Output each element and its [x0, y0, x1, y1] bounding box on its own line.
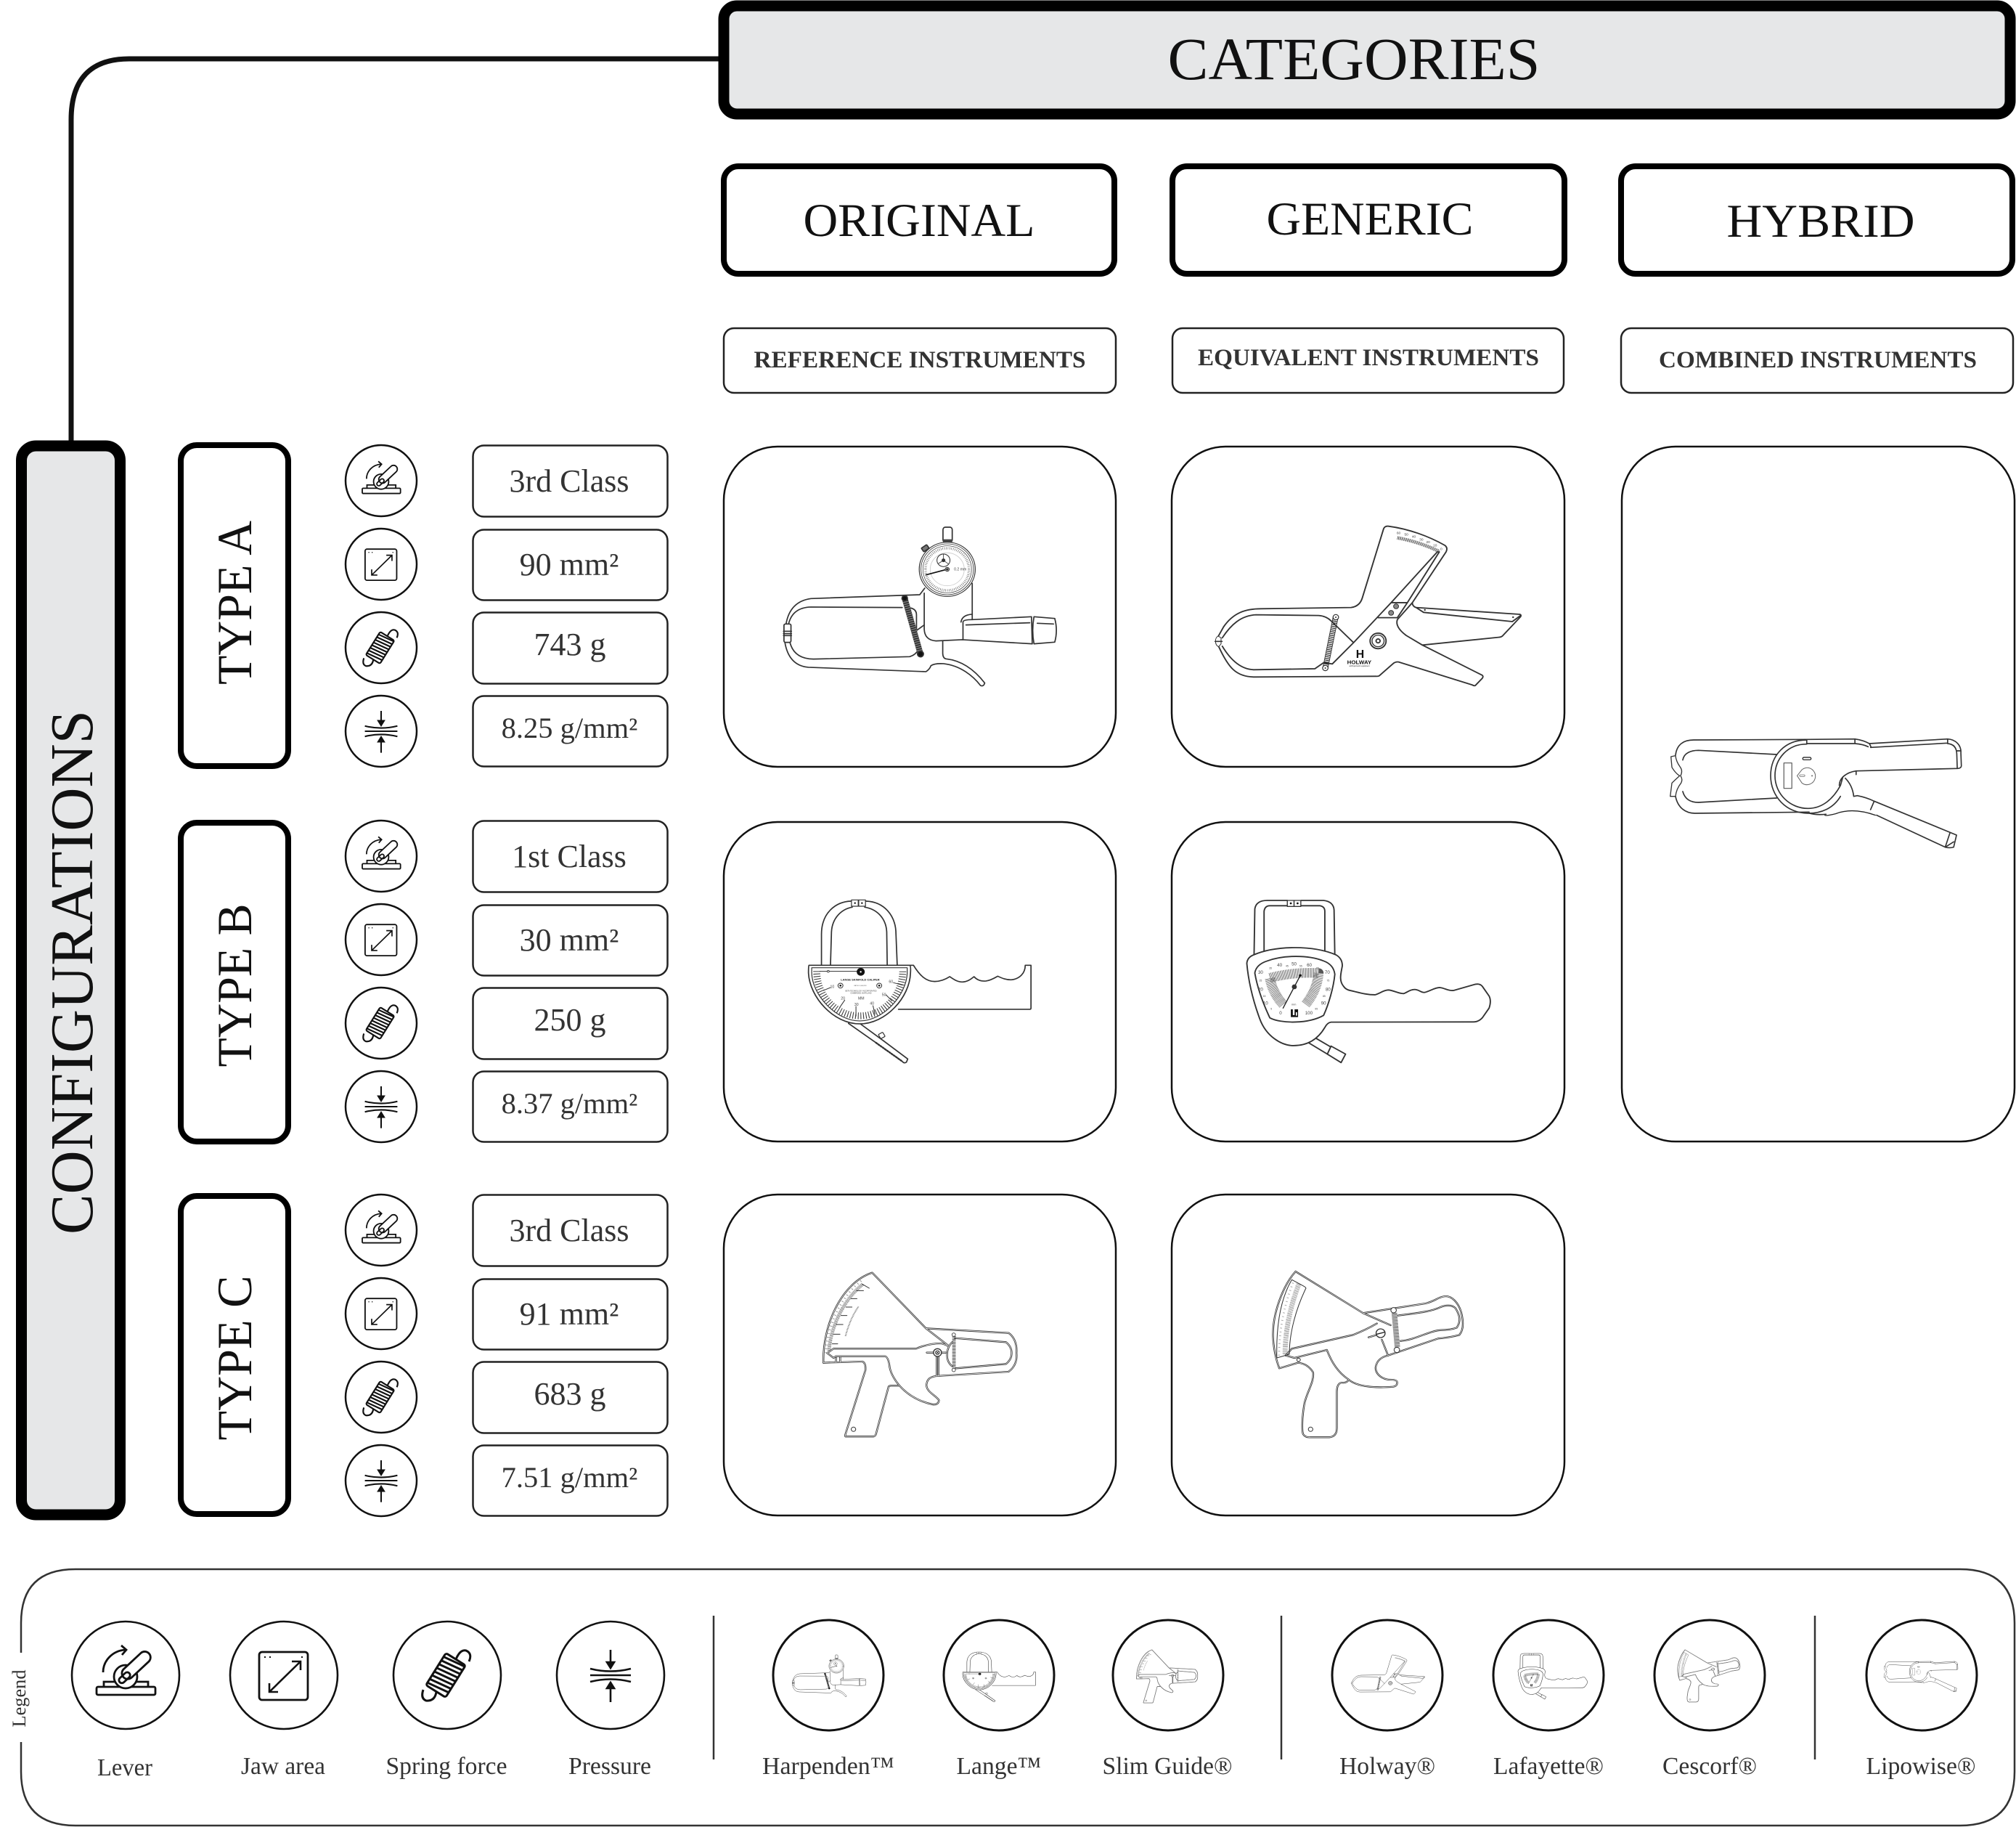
- illustration: Lafayette caliper: 35: [1269, 967, 1272, 969]
- spec: lever class: [346, 1195, 668, 1266]
- illustration: Cescorf caliper: [1273, 1271, 1463, 1437]
- illustration: Lafayette caliper: 25: [1259, 980, 1262, 982]
- illustration: Lafayette caliper: [1246, 900, 1490, 1062]
- connector: categories to configurations: [71, 59, 719, 442]
- spec: spring force: 250 g: [534, 1002, 605, 1038]
- legend item: Lipowise: Lipowise®: [1866, 1753, 1976, 1780]
- spec: pressure: [346, 1071, 668, 1142]
- illustration: Lafayette caliper: 100: [1305, 1011, 1313, 1016]
- illustration: Lafayette caliper: 15: [1263, 995, 1266, 998]
- illustration: Lafayette caliper: 65: [1316, 967, 1319, 969]
- spec: lever class: [346, 445, 668, 517]
- heading: original: ORIGINAL: [803, 195, 1035, 247]
- spec: spring force: [346, 612, 668, 684]
- illustration: Lafayette caliper: 75: [1326, 980, 1329, 982]
- heading: categories: CATEGORIES: [1167, 25, 1540, 92]
- spec: jaw area: [346, 529, 668, 600]
- spec: lever class: 3rd Class: [510, 463, 629, 499]
- legend item: Lafayette: Lafayette®: [1493, 1753, 1604, 1780]
- legend item: Cescorf: Cescorf®: [1662, 1753, 1757, 1780]
- illustration: Lafayette caliper: 60: [1307, 963, 1313, 968]
- spec: lever class: 1st Class: [512, 839, 627, 874]
- legend item: Slim Guide: [1102, 1620, 1233, 1780]
- illustration: Lafayette caliper: 45: [1286, 965, 1289, 968]
- legend item: Harpenden: Harpenden™: [762, 1753, 894, 1780]
- panel: Lipowise caliper (hybrid): [1622, 447, 2015, 1142]
- illustration: Holway caliper: HOLWAY: [1347, 659, 1372, 665]
- heading: generic: GENERIC: [1266, 193, 1474, 245]
- legend item: lever: Lever: [97, 1754, 153, 1781]
- panel: Holway caliper (generic, type A): [1172, 447, 1564, 767]
- illustration: Lange caliper: 30: [854, 1003, 859, 1007]
- illustration: Harpenden caliper: [783, 527, 1056, 686]
- illustration: Lange caliper: [809, 900, 1031, 1063]
- illustration: Lafayette caliper: 0: [1279, 1011, 1282, 1016]
- spec: jaw area: [346, 904, 668, 976]
- illustration: Holway caliper: 50: [1405, 533, 1408, 537]
- illustration: Holway caliper: 60: [1397, 532, 1401, 536]
- spec: jaw area: 90 mm²: [520, 547, 619, 582]
- illustration: Lange caliper: BETA TECHNOLOGY INCORPORATED: [845, 990, 877, 992]
- type C specifications: [346, 1195, 668, 1516]
- illustration: Holway caliper: 10: [1433, 544, 1437, 548]
- legend item: pressure: Pressure: [568, 1753, 651, 1780]
- legend item: Lange: [944, 1620, 1054, 1780]
- illustration: Lafayette caliper: mm: [1291, 1004, 1296, 1006]
- illustration: Lange caliper: 10: [830, 985, 834, 990]
- panel: Lafayette caliper (generic, type B): [1172, 822, 1564, 1142]
- spec: jaw area: [346, 1278, 668, 1349]
- spec: spring force: 743 g: [534, 627, 605, 662]
- illustration: Lafayette caliper: 30: [1258, 970, 1263, 975]
- illustration: Lafayette caliper: 90: [1321, 1001, 1326, 1006]
- legend title: Legend: [9, 1669, 30, 1728]
- illustration: Lafayette caliper: 5: [1270, 1007, 1272, 1010]
- heading: generic: [1172, 166, 1564, 274]
- illustration: Lafayette caliper: 85: [1323, 995, 1326, 998]
- illustration: Lafayette caliper: 70: [1325, 970, 1330, 975]
- panel: legend: [9, 1569, 2015, 1826]
- heading: categories: [724, 6, 2010, 114]
- type B specifications: [346, 821, 668, 1142]
- legend item: spring force: [386, 1621, 507, 1780]
- illustration: Lange caliper: 50: [882, 993, 886, 998]
- illustration: Lange caliper: MM: [858, 997, 865, 1001]
- subheading: combined instruments: [1621, 328, 2013, 393]
- illustration: Lange caliper: 60: [889, 980, 893, 985]
- spec: pressure: 8.37 g/mm²: [502, 1087, 637, 1120]
- illustration: Lange caliper: CAMBRIDGE, MARYLAND: [850, 992, 872, 994]
- illustration: Lafayette caliper: 50: [1291, 962, 1297, 967]
- legend item: spring force: Spring force: [386, 1753, 507, 1780]
- illustration: Lipowise caliper: [1670, 739, 1962, 847]
- legend item: Lange: Lange™: [957, 1753, 1041, 1780]
- spec: jaw area: 30 mm²: [520, 922, 619, 958]
- illustration: Lange caliper: 40: [870, 1001, 874, 1006]
- panel: Lange caliper (original, type B): [724, 822, 1116, 1142]
- illustration: Slim Guide caliper: [823, 1273, 1016, 1436]
- illustration: Holway caliper: 0: [1440, 547, 1442, 551]
- subheading: reference instruments: [724, 328, 1116, 393]
- legend item: Harpenden: [762, 1620, 894, 1780]
- spec: pressure: 7.51 g/mm²: [502, 1461, 637, 1494]
- illustration: Holway caliper: H: [1356, 648, 1364, 661]
- spec: lever class: 3rd Class: [510, 1213, 629, 1248]
- panel: Harpenden caliper (original, type A): [724, 447, 1116, 767]
- configuration: type A label: [181, 445, 288, 766]
- subheading: reference instruments: REFERENCE INSTRUMENTS: [754, 347, 1086, 373]
- heading: hybrid: [1621, 166, 2012, 274]
- heading: configurations: CONFIGURATIONS: [38, 710, 106, 1234]
- legend item: Lipowise: [1866, 1620, 1977, 1780]
- heading: original: [724, 166, 1114, 274]
- legend item: jaw area: Jaw area: [241, 1753, 325, 1780]
- legend item: Holway: Holway®: [1339, 1753, 1435, 1780]
- heading: configurations: [22, 446, 121, 1515]
- illustration: Lafayette caliper: 80: [1326, 987, 1331, 992]
- configuration: type C label: [181, 1196, 288, 1514]
- illustration: Lange caliper: 20: [841, 996, 845, 1001]
- subheading: equivalent instruments: EQUIVALENT INSTRUMENTS: [1198, 345, 1539, 371]
- illustration: Lange caliper: PAT NO 3,008,239: [854, 985, 867, 987]
- illustration: Lafayette caliper: 10: [1263, 1001, 1268, 1006]
- panel: Slim Guide caliper (original, type C): [724, 1195, 1116, 1515]
- spec: jaw area: 91 mm²: [520, 1296, 619, 1332]
- illustration: Holway caliper: 40: [1412, 534, 1416, 539]
- illustration: Lafayette caliper: 20: [1258, 987, 1263, 992]
- spec: spring force: [346, 988, 668, 1059]
- illustration: Harpenden caliper: 0.2 mm: [954, 568, 966, 572]
- illustration: Lafayette caliper: 55: [1299, 965, 1302, 968]
- spec: spring force: 683 g: [534, 1376, 605, 1412]
- illustration: Lafayette caliper: 40: [1277, 963, 1283, 968]
- illustration: Holway caliper: 30: [1419, 537, 1424, 542]
- legend item: Cescorf: [1654, 1620, 1765, 1780]
- subheading: combined instruments: COMBINED INSTRUMENTS: [1659, 347, 1977, 373]
- subheading: equivalent instruments: [1172, 328, 1564, 393]
- heading: hybrid: HYBRID: [1726, 195, 1915, 248]
- spec: pressure: [346, 696, 668, 767]
- illustration: Lange caliper: LANGE SKINFOLD CALIPER: [841, 977, 880, 981]
- legend item: jaw area: [230, 1621, 338, 1780]
- configuration: type B label: [181, 823, 288, 1142]
- legend item: Holway: [1332, 1620, 1442, 1780]
- panel: Cescorf caliper (generic, type C): [1172, 1195, 1564, 1515]
- spec: pressure: [346, 1445, 668, 1516]
- legend item: pressure: [557, 1621, 664, 1780]
- legend item: lever: [72, 1621, 179, 1781]
- spec: spring force: [346, 1362, 668, 1433]
- spec: lever class: [346, 821, 668, 892]
- type A specifications: [346, 445, 668, 767]
- configuration: type A label: TYPE A: [207, 521, 262, 685]
- legend item: Lafayette: [1493, 1620, 1604, 1780]
- illustration: Holway caliper: anthropometric equipment: [1350, 665, 1370, 667]
- illustration: Holway caliper: [1215, 526, 1521, 685]
- illustration: Holway caliper: 20: [1426, 540, 1430, 545]
- configuration: type B label: TYPE B: [207, 903, 262, 1067]
- illustration: Lafayette caliper: 95: [1315, 1007, 1318, 1010]
- spec: pressure: 8.25 g/mm²: [502, 712, 637, 744]
- configuration: type C label: TYPE C: [207, 1275, 262, 1441]
- legend item: Slim Guide: Slim Guide®: [1102, 1753, 1233, 1780]
